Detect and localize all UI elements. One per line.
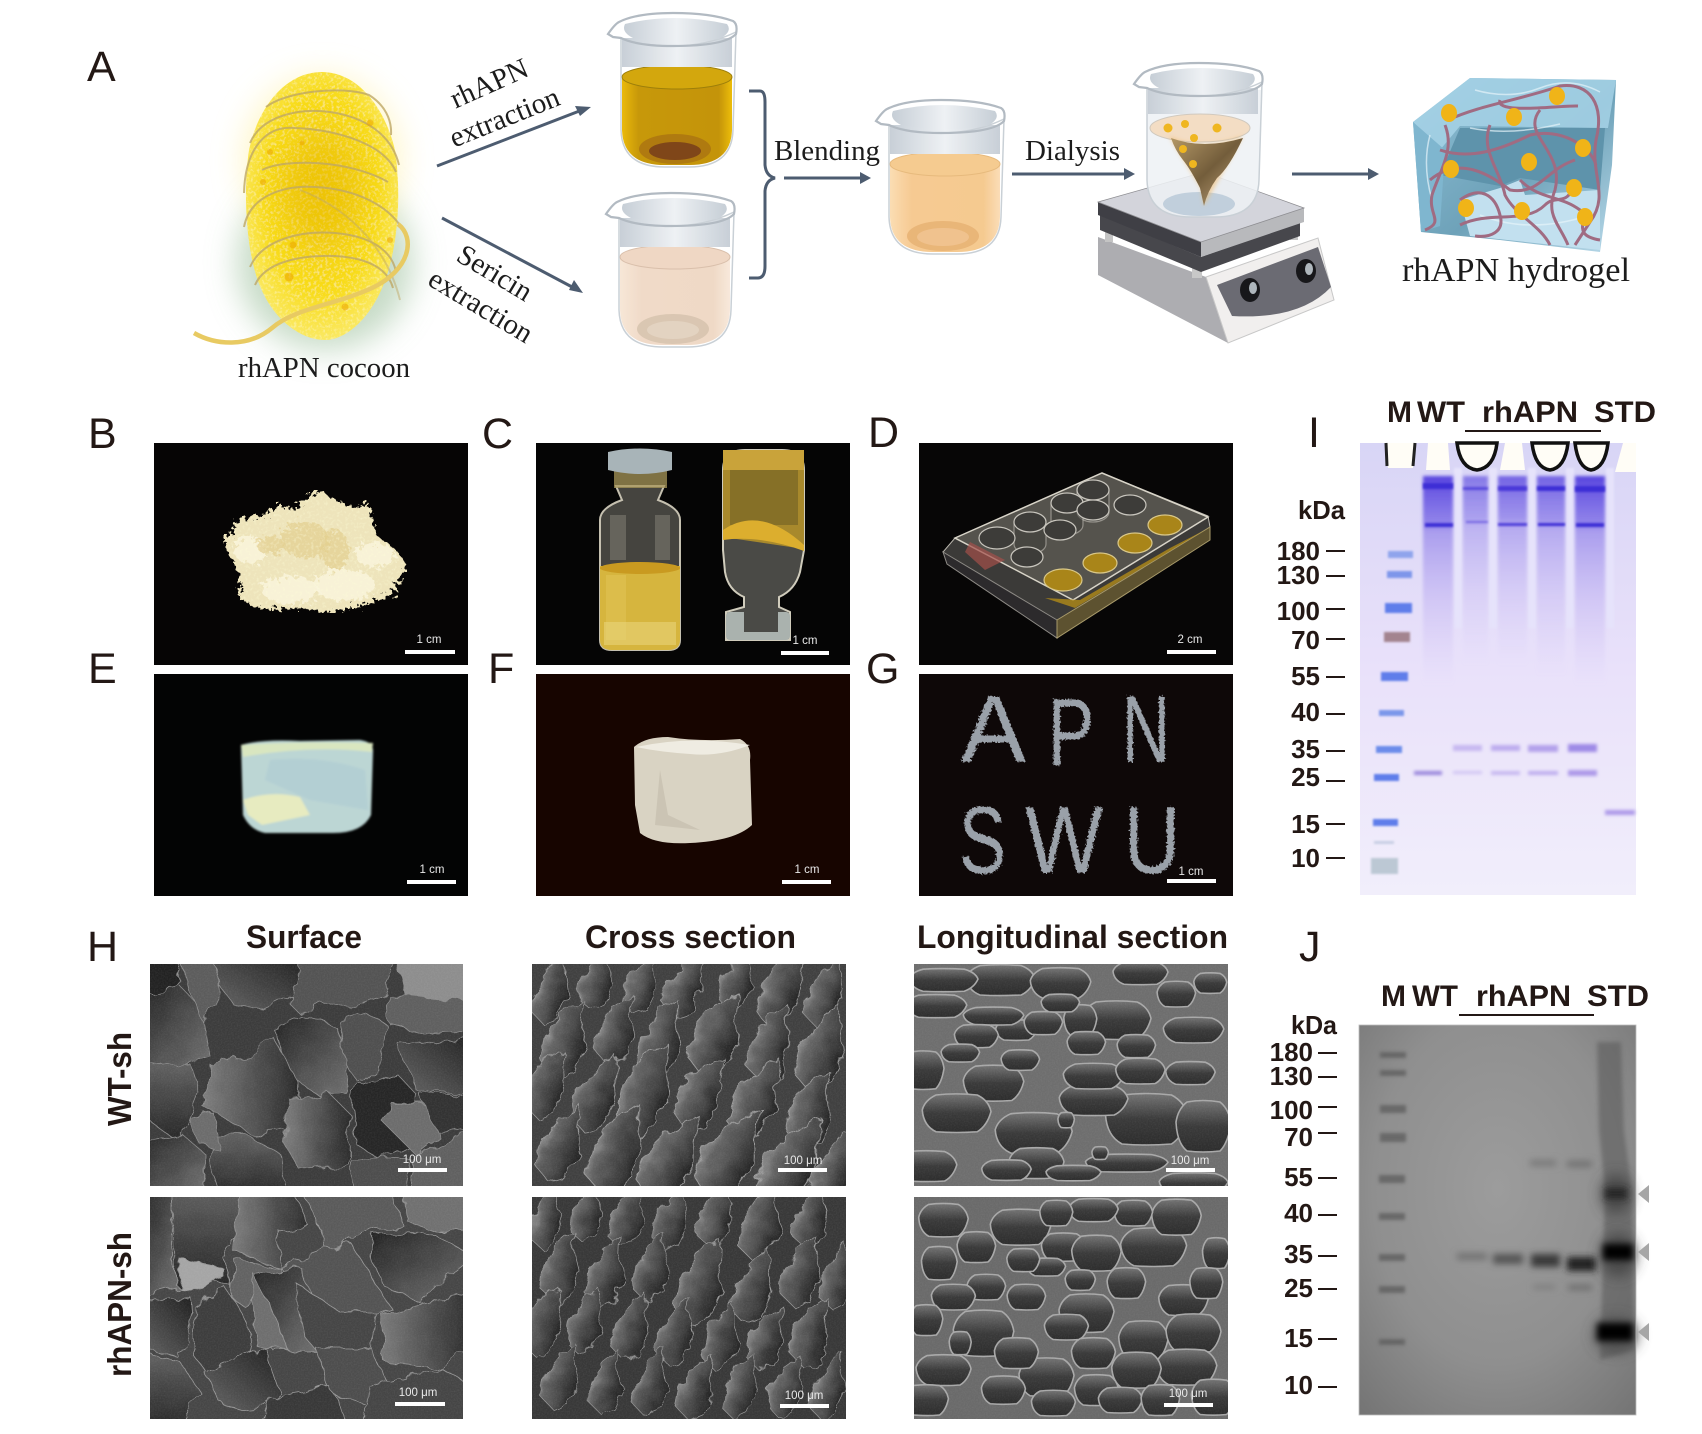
icon: magnetic stirrer xyxy=(1098,172,1334,343)
icon: rhAPN cocoon xyxy=(194,72,413,350)
ladder labels: 100 xyxy=(1277,596,1320,626)
photo G xyxy=(919,674,1233,896)
photo D: 2 cm xyxy=(1178,634,1202,646)
panel H: SEM images xyxy=(87,919,1235,1429)
photo D xyxy=(919,443,1233,665)
label: sericin extraction: extraction xyxy=(423,263,539,350)
beaker: dialysis vortex on stirrer xyxy=(1134,63,1263,217)
photo G: A xyxy=(961,676,1026,783)
arrow: blending xyxy=(784,172,871,184)
kDa label: kDa xyxy=(1298,495,1346,525)
lane headers: rhAPN xyxy=(1482,396,1578,429)
photo B xyxy=(154,443,468,665)
arrow: rhAPN extraction xyxy=(437,106,591,166)
ladder labels: 35 xyxy=(1291,734,1320,764)
kDa label: kDa xyxy=(1291,1010,1338,1040)
lane gaps xyxy=(1454,468,1614,628)
panel B: lyophilized fibroin xyxy=(88,410,468,665)
panel label F: F xyxy=(488,645,514,693)
photo G: W xyxy=(1025,787,1103,894)
ladder labels: 70 xyxy=(1284,1122,1313,1152)
ladder labels xyxy=(1270,1037,1337,1400)
photo G: 1 cm xyxy=(1179,866,1203,878)
ladder labels: 40 xyxy=(1291,697,1320,727)
photo F: 1 cm xyxy=(795,864,819,876)
protein bands xyxy=(1414,744,1635,815)
column title: surface: Surface xyxy=(246,919,362,955)
row label: WT-sh: WT-sh xyxy=(101,1032,138,1126)
hydrogel label: rhAPN hydrogel xyxy=(1402,252,1630,289)
ladder labels: 130 xyxy=(1270,1061,1313,1091)
lane headers: WT xyxy=(1412,980,1458,1013)
cocoon label: rhAPN cocoon xyxy=(238,352,410,384)
photo C xyxy=(536,443,850,665)
panel C: vials xyxy=(482,410,850,665)
label: rhAPN extraction: rhAPN xyxy=(445,52,533,115)
arrowheads: STD bands xyxy=(1638,1185,1649,1341)
SEM: surface rhAPN-sh: 100 μm xyxy=(399,1387,437,1399)
arrow: dialysis xyxy=(1012,168,1135,180)
ladder labels: 15 xyxy=(1284,1323,1313,1353)
panel J: western blot xyxy=(1270,923,1649,1415)
lane headers xyxy=(1387,396,1656,432)
SEM: longitudinal section rhAPN-sh: 100 μm xyxy=(1169,1388,1207,1400)
panel E: hydrogel photo xyxy=(88,645,468,896)
sample lanes xyxy=(1423,476,1605,686)
SEM: cross section rhAPN-sh: 100 μm xyxy=(785,1390,823,1402)
panel F: freeze-dried scaffold xyxy=(488,645,850,896)
panel label I: I xyxy=(1308,409,1320,457)
beaker: rhAPN solution xyxy=(608,13,737,167)
ladder labels: 15 xyxy=(1291,809,1320,839)
panel I: SDS-PAGE gel xyxy=(1277,396,1656,895)
ladder labels: 40 xyxy=(1284,1198,1313,1228)
panel label D: D xyxy=(868,409,899,457)
bracket xyxy=(749,91,775,278)
SEM: surface WT-sh xyxy=(140,954,473,1196)
SEM: longitudinal section WT-sh: 100 μm xyxy=(1171,1155,1209,1167)
panel label H: H xyxy=(87,923,118,971)
photo E xyxy=(154,674,468,896)
panel label B: B xyxy=(88,410,117,458)
icon: rhAPN hydrogel network xyxy=(1413,78,1616,252)
sample bands xyxy=(1457,1160,1596,1290)
photo G: S xyxy=(959,787,1006,894)
row label: rhAPN-sh: rhAPN-sh xyxy=(101,1232,138,1377)
label: sericin extraction: Sericin xyxy=(451,238,539,308)
SEM: cross section WT-sh: 100 μm xyxy=(784,1155,822,1167)
arrow: to hydrogel xyxy=(1292,168,1379,180)
standard lane xyxy=(1594,1042,1638,1360)
photo F xyxy=(536,674,850,896)
photo G: U xyxy=(1124,787,1180,894)
ladder labels: 55 xyxy=(1291,661,1320,691)
panel A: preparation workflow xyxy=(87,13,1630,384)
upright vial xyxy=(600,448,680,650)
lane headers: STD xyxy=(1594,396,1656,429)
marker ladder xyxy=(1371,551,1413,874)
beaker: sericin solution xyxy=(606,193,735,347)
SEM: cross section rhAPN-sh xyxy=(516,1176,861,1425)
lane headers: WT xyxy=(1417,396,1465,429)
ladder labels: 180 xyxy=(1270,1037,1313,1067)
lane headers: rhAPN xyxy=(1476,980,1571,1013)
label: blending: Blending xyxy=(774,135,880,167)
lane headers: M xyxy=(1387,396,1412,429)
ladder labels: 70 xyxy=(1291,625,1320,655)
label: dialysis: Dialysis xyxy=(1025,135,1120,167)
SEM: longitudinal section WT-sh xyxy=(896,962,1231,1193)
photo G: N xyxy=(1122,676,1170,783)
label: rhAPN extraction: extraction xyxy=(445,81,565,154)
ladder labels: 130 xyxy=(1277,560,1320,590)
panel label G: G xyxy=(866,645,899,693)
column title: cross section: Cross section xyxy=(585,919,796,955)
lane headers xyxy=(1381,980,1649,1016)
lane headers: M xyxy=(1381,980,1406,1013)
photo E: 1 cm xyxy=(420,864,444,876)
photo B: 1 cm xyxy=(417,634,441,646)
panel label A: A xyxy=(87,43,116,91)
arrow: sericin extraction xyxy=(442,218,583,293)
ladder labels: 25 xyxy=(1291,762,1320,792)
ladder labels: 25 xyxy=(1284,1273,1313,1303)
sample wells xyxy=(1386,443,1636,472)
gel image I xyxy=(1360,443,1636,895)
SEM: surface rhAPN-sh xyxy=(140,1187,473,1429)
photo C: 1 cm xyxy=(793,635,817,647)
panel label J: J xyxy=(1299,923,1320,971)
column title: longitudinal section: Longitudinal section xyxy=(917,919,1228,955)
blot image J xyxy=(1359,1025,1638,1415)
lane headers: STD xyxy=(1587,980,1649,1013)
inverted vial xyxy=(723,450,804,640)
beaker: blended solution xyxy=(876,100,1005,254)
photo G: P xyxy=(1048,679,1094,786)
ladder labels: 100 xyxy=(1270,1095,1313,1125)
ladder labels: 55 xyxy=(1284,1162,1313,1192)
panel G: written hydrogel letters xyxy=(866,645,1233,896)
ladder labels: 180 xyxy=(1277,536,1320,566)
ladder labels: 35 xyxy=(1284,1239,1313,1269)
ladder labels: 10 xyxy=(1284,1370,1313,1400)
SEM: cross section WT-sh xyxy=(518,942,873,1222)
SEM: surface WT-sh: 100 μm xyxy=(403,1154,441,1166)
panel label C: C xyxy=(482,410,513,458)
ladder labels: 10 xyxy=(1291,843,1320,873)
ladder labels xyxy=(1277,536,1345,873)
panel D: well plate xyxy=(868,409,1233,665)
SEM: longitudinal section rhAPN-sh xyxy=(904,1197,1235,1419)
marker ladder xyxy=(1379,1052,1406,1345)
panel label E: E xyxy=(88,645,117,693)
